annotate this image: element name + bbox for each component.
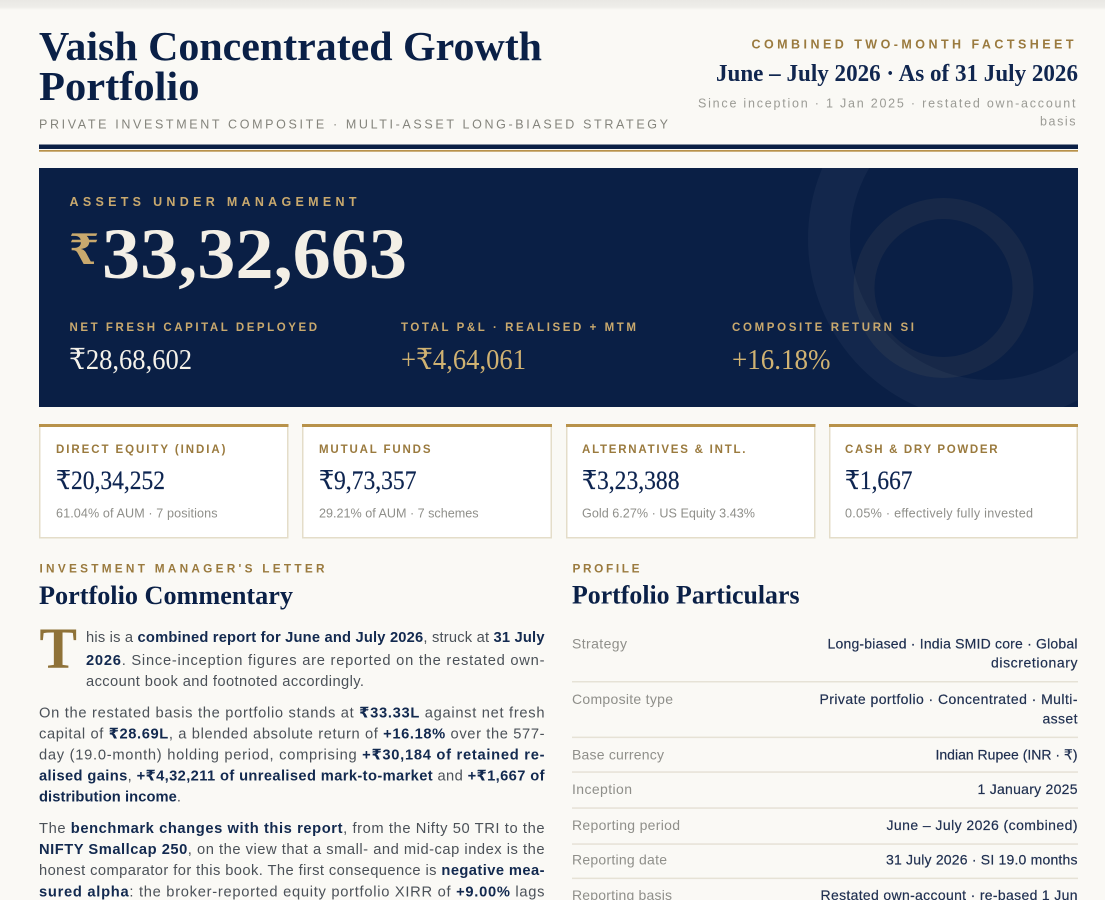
paragraph 3 — [39, 821, 545, 900]
row: reporting period: June – July 2026 (combined) — [886, 817, 1078, 833]
header — [39, 23, 1078, 132]
metric: composite return — [732, 322, 914, 376]
paragraph 1 — [86, 630, 545, 690]
paragraph 3: The benchmark changes with this report, from the Nifty 50 TRI to the — [39, 821, 544, 837]
panel: direct equity card: ₹20,34,252 — [56, 466, 165, 495]
AUM label: ASSETS UNDER MANAGEMENT — [70, 195, 357, 209]
row: base currency — [572, 746, 1078, 762]
paragraph 2 — [39, 705, 545, 805]
row: reporting basis — [572, 887, 1078, 900]
row: inception — [572, 781, 1078, 797]
subtitle: PRIVATE INVESTMENT COMPOSITE · MULTI-ASSET LONG-BIASED STRATEGY — [39, 118, 669, 132]
AUM value: 33,32,663 — [102, 214, 407, 294]
paragraph 2: day (19.0-month) holding period, comprising +₹30,184 of retained re- — [39, 747, 545, 763]
panel: cash card: CASH & DRY POWDER — [845, 444, 998, 456]
panel: assets under management hero — [39, 168, 1078, 407]
profile eyebrow: PROFILE — [572, 561, 640, 575]
row: composite type — [572, 691, 1078, 726]
metric: total P&L — [401, 322, 636, 376]
row: inception: Inception — [572, 781, 632, 797]
title — [39, 23, 542, 109]
paragraph 2: distribution income. — [39, 789, 181, 805]
row: base currency: Base currency — [572, 746, 664, 762]
paragraph 3: NIFTY Smallcap 250, on the view that a small- and mid-cap index is the — [39, 842, 544, 858]
paragraph 2: alised gains, +₹4,32,211 of unrealised mark-to-market and +₹1,667 of — [39, 768, 545, 784]
drop cap: T — [40, 616, 77, 681]
row: reporting date: 31 July 2026 · SI 19.0 months — [886, 852, 1078, 868]
metric: net fresh capital — [69, 322, 317, 376]
since inception note: Since inception · 1 Jan 2025 · restated own-account — [698, 96, 1076, 110]
panel: direct equity card: DIRECT EQUITY (INDIA) — [56, 444, 226, 456]
panel: cash card — [829, 424, 1078, 538]
particulars heading: Portfolio Particulars — [572, 580, 800, 609]
row: strategy: Strategy — [572, 635, 627, 651]
metric: net fresh capital: NET FRESH CAPITAL DEPLOYED — [70, 322, 317, 334]
row: strategy: Long-biased · India SMID core · Global — [828, 635, 1078, 651]
row: reporting date — [572, 852, 1078, 868]
factsheet eyebrow: COMBINED TWO-MONTH FACTSHEET — [752, 38, 1074, 52]
panel: cash card: ₹1,667 — [845, 466, 912, 495]
row: reporting period — [572, 817, 1078, 833]
panel: mutual funds card: ₹9,73,357 — [319, 466, 416, 495]
panel: direct equity card — [39, 424, 288, 538]
panel: mutual funds card: MUTUAL FUNDS — [319, 444, 431, 456]
row: composite type: Composite type — [572, 691, 673, 707]
row: composite type: Private portfolio · Concentrated · Multi- — [820, 691, 1078, 707]
commentary heading: Portfolio Commentary — [39, 581, 293, 610]
title: Vaish Concentrated Growth — [39, 23, 542, 69]
panel: alternatives card — [566, 424, 816, 538]
paragraph 1: account book and footnoted accordingly. — [86, 674, 364, 690]
panel: cash card: 0.05% · effectively fully invested — [845, 506, 1033, 520]
metric: total P&L: +₹4,64,061 — [401, 344, 526, 376]
panel: mutual funds card — [302, 424, 552, 538]
since inception note: basis — [1040, 114, 1076, 128]
panel: portfolio commentary — [39, 561, 545, 900]
title: Portfolio — [39, 63, 199, 109]
row: reporting period: Reporting period — [572, 817, 680, 833]
panel: portfolio particulars — [572, 561, 1078, 900]
row: inception: 1 January 2025 — [978, 781, 1078, 797]
metric: total P&L: TOTAL P&L · REALISED + MTM — [401, 322, 636, 334]
row: strategy — [572, 635, 1078, 671]
panel: alternatives card: ₹3,23,388 — [582, 466, 680, 495]
metric: composite return: +16.18% — [732, 344, 830, 376]
row: strategy: discretionary — [991, 655, 1078, 671]
panel: direct equity card: 61.04% of AUM · 7 positions — [56, 506, 218, 520]
metric: composite return: COMPOSITE RETURN SI — [732, 322, 914, 334]
reporting period heading: June – July 2026 · As of 31 July 2026 — [716, 60, 1078, 87]
paragraph 2: On the restated basis the portfolio stands at ₹33.33L against net fresh — [39, 705, 544, 721]
panel: alternatives card: ALTERNATIVES & INTL. — [582, 444, 746, 456]
paragraph 1: his is a combined report for June and July 2026, struck at 31 July — [86, 630, 545, 646]
paragraph 3: honest comparator for this book. The first consequence is negative mea- — [39, 863, 545, 879]
panel: mutual funds card: 29.21% of AUM · 7 schemes — [319, 506, 478, 520]
since inception note — [698, 96, 1076, 128]
row: composite type: asset — [1042, 710, 1078, 726]
AUM value: ₹ — [69, 228, 99, 274]
row dividers — [572, 681, 1078, 879]
paragraph 1: 2026. Since-inception figures are reported on the restated own- — [86, 653, 545, 669]
commentary eyebrow: INVESTMENT MANAGER'S LETTER — [40, 561, 325, 575]
metric: net fresh capital: ₹28,68,602 — [69, 344, 192, 376]
panel: alternatives card: Gold 6.27% · US Equity 3.43% — [582, 506, 755, 520]
row: reporting date: Reporting date — [572, 852, 667, 868]
paragraph 2: capital of ₹28.69L, a blended absolute return of +16.18% over the 577- — [39, 726, 545, 742]
row: base currency: Indian Rupee (INR · ₹) — [936, 746, 1078, 762]
